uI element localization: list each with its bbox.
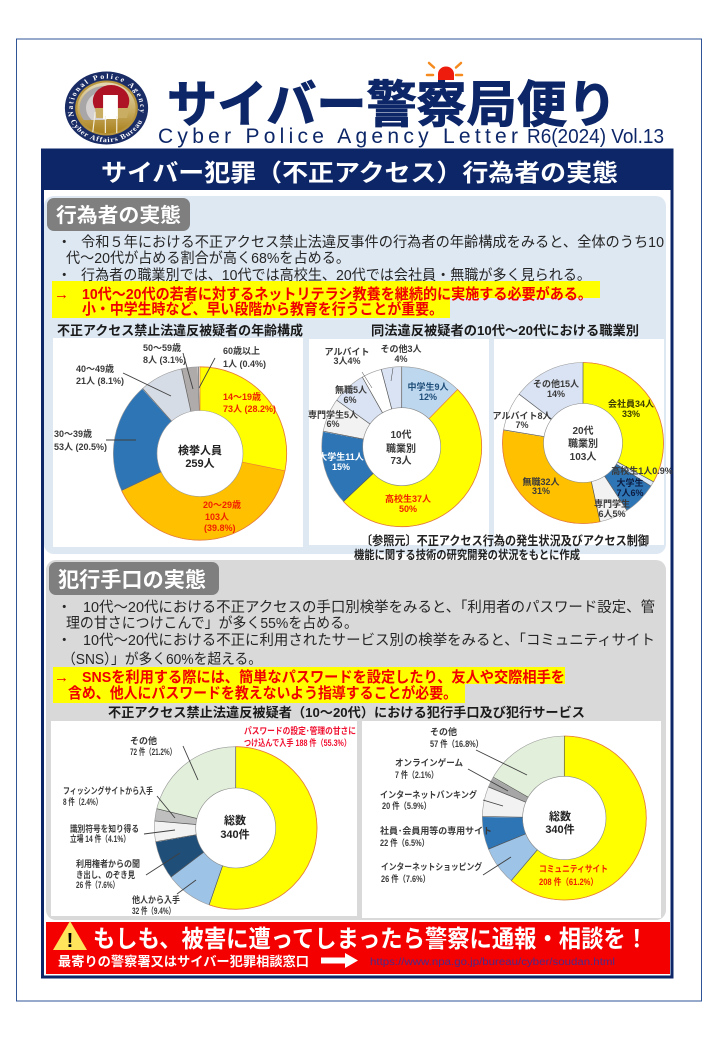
banner subtext: 最寄りの警察署又はサイバー犯罪相談窓口 [58, 954, 309, 969]
chart: age composition donut: 14～19歳 [223, 391, 261, 402]
chart: teens occupation donut: 3人4% [333, 356, 361, 366]
banner: report to police [46, 921, 670, 974]
chart: age composition donut: 21人 (8.1%) [76, 376, 124, 386]
chart: methods donut: 識別符号を知り得る [70, 823, 139, 834]
chart: teens occupation donut: 73人 [390, 455, 412, 467]
callout: password guidance: → [54, 669, 69, 686]
chart: teens occupation donut [308, 339, 489, 545]
chart: methods donut: 26 件（7.6%） [76, 879, 119, 890]
chart: methods donut [51, 721, 357, 916]
chart: services donut: その他 [430, 726, 457, 737]
chart: methods donut: その他 [130, 735, 157, 746]
chart: services donut: 22 件（6.5%） [380, 837, 429, 848]
chart: services donut: コミュニティサイト [539, 864, 608, 874]
callout: password guidance: SNSを利用する際には、簡単なパスワードを設定したり、友人や交際相手を [82, 668, 565, 686]
issue number: R6(2024) Vol.13 [527, 126, 664, 148]
chart: age composition donut [53, 338, 303, 547]
chart: age composition donut: 1人 (0.4%) [223, 359, 266, 369]
callout: education need: → [54, 286, 69, 303]
chart: twenties occupation donut: 33% [622, 409, 640, 419]
content frame [42, 150, 672, 977]
heading: age chart: 不正アクセス禁止法違反被疑者の年齢構成 [57, 323, 303, 338]
chart: age composition donut: 8人 (3.1%) [143, 355, 186, 365]
chart: twenties occupation donut: 7人6% [616, 488, 644, 498]
chart: methods donut: 他人から入手 [132, 894, 180, 905]
callout: password guidance: 含め、他人にパスワードを教えないよう指導することが必要。 [68, 684, 457, 702]
source note: 〔参照元〕不正アクセス行為の発生状況及びアクセス制御 [361, 533, 649, 548]
chart: twenties occupation donut: アルバイト8人 [493, 411, 551, 421]
chart: twenties occupation donut: 専門学生 [594, 498, 630, 509]
chart: services donut: オンラインゲーム [395, 757, 463, 768]
heading: occupation charts: 同法違反被疑者の10代～20代における職業別 [371, 323, 639, 338]
callout: password guidance [53, 667, 565, 703]
icon: siren light [427, 63, 462, 80]
chart: twenties occupation donut: 会社員34人 [608, 398, 654, 409]
text block: offender summary: ・ [57, 235, 72, 251]
chart: methods donut: パスワードの設定･管理の甘さに [244, 725, 356, 736]
source note [354, 533, 649, 562]
logo: cyber affairs bureau emblem: National Police Agency [68, 74, 144, 117]
arrow [321, 953, 358, 968]
chart: age composition donut: 40～49歳 [76, 363, 114, 374]
text block: offender summary: 行為者の職業別では、10代では高校生、20代では会社員・無職が多く見られる。 [81, 266, 591, 284]
callout: education need: 10代～20代の若者に対するネットリテラシ教養を継続的に実施する必要がある。 [82, 285, 592, 303]
text block: methods summary: （SNS）」が多く60%を超える。 [62, 650, 262, 668]
text block: methods summary: 理の甘さにつけこんで」が多く55%を占める。 [66, 614, 358, 632]
heading: methods and services charts: 不正アクセス禁止法違反被疑者（10～20代）における犯行手口及び犯行サービス [108, 705, 585, 720]
callout: education need: 小・中学生時など、早い段階から教育を行うことが重要。 [82, 300, 443, 318]
chart: services donut: 26 件（7.6%） [381, 873, 430, 884]
chart: methods donut: 72 件（21.2%） [130, 746, 176, 757]
chart: twenties occupation donut: 6人5% [598, 509, 626, 519]
chart: teens occupation donut: 中学生9人 [407, 381, 449, 392]
chart: services donut: 総数 [549, 809, 571, 823]
heading tab: methods [49, 562, 219, 595]
text block: methods summary: ・ [57, 600, 72, 616]
chart: age composition donut: 73人 (28.2%) [223, 404, 276, 414]
chart: teens occupation donut: 職業別 [386, 442, 416, 455]
chart: age composition donut: 30～39歳 [54, 428, 92, 439]
chart: twenties occupation donut: 14% [547, 389, 565, 399]
text block: methods summary: 10代～20代における不正に利用されたサービス別の検挙をみると、「コミュニティサイト [83, 632, 655, 649]
chart: teens occupation donut: 高校生37人 [385, 493, 431, 504]
chart: age composition donut: 259人 [185, 458, 215, 470]
chart: twenties occupation donut: 大学生 [616, 477, 644, 488]
chart: services donut: 208 件（61.2%） [539, 876, 598, 887]
chart: methods donut: 立場 14 件（4.1%） [70, 833, 130, 844]
banner headline: もしも、被害に遭ってしまったら警察に通報・相談を！ [93, 926, 648, 953]
logo: cyber affairs bureau emblem [64, 72, 148, 144]
chart: teens occupation donut: アルバイト [325, 347, 369, 357]
panel: methods [46, 560, 666, 920]
heading tab: offenders: 行為者の実態 [56, 204, 181, 227]
chart: methods donut: き出し、のぞき見 [76, 869, 135, 880]
chart: twenties occupation donut: 高校生1人0.9% [611, 465, 673, 476]
chart: services donut: 20 件（5.9%） [382, 800, 431, 811]
text block: offender summary: 令和５年における不正アクセス禁止法違反事件の行為者の年齢構成をみると、全体のうち10 [81, 234, 664, 251]
chart: methods donut: 32 件（9.4%） [132, 905, 175, 916]
chart: age composition donut: 53人 (20.5%) [54, 442, 107, 452]
chart: age composition donut: 60歳以上 [223, 345, 260, 356]
chart: twenties occupation donut: 無職32人 [522, 476, 560, 487]
main title: サイバー警察局便り [167, 77, 617, 133]
chart: services donut: 340件 [545, 822, 575, 836]
chart: twenties occupation donut: 31% [532, 486, 550, 496]
chart: age composition donut: 検挙人員 [178, 443, 222, 457]
chart: teens occupation donut: 専門学生5人 [308, 409, 358, 420]
chart: teens occupation donut: 12% [419, 392, 437, 402]
chart: services donut: 7 件（2.1%） [395, 769, 438, 780]
text block: methods summary [57, 598, 655, 668]
chart: services donut: インターネットショッピング [381, 861, 482, 872]
chart: methods donut: 利用権者からの聞 [76, 858, 140, 869]
icon: warning triangle: ! [67, 930, 73, 952]
chart: age composition donut: 20～29歳 [203, 499, 241, 510]
chart: twenties occupation donut: その他15人 [533, 378, 579, 389]
logo: cyber affairs bureau emblem: Cyber Affairs Bureau [71, 120, 142, 142]
chart: age composition donut: (39.8%) [204, 523, 236, 533]
text block: methods summary: ・ [57, 633, 72, 649]
source note: 機能に関する技術の研究開発の状況をもとに作成 [354, 547, 580, 562]
chart: methods donut: フィッシングサイトから入手 [63, 785, 153, 796]
panel: offenders [44, 196, 673, 562]
chart: teens occupation donut: 4% [394, 354, 408, 364]
chart: teens occupation donut: 15% [332, 462, 350, 472]
text block: offender summary: 代～20代が占める割合が高く68%を占める。 [66, 250, 350, 267]
consultation link: https://www.npa.go.jp/bureau/cyber/soudan.html [370, 957, 615, 968]
chart: teens occupation donut: 6% [343, 395, 357, 405]
chart: services donut: インターネットバンキング [380, 789, 477, 800]
chart: teens occupation donut: 大学生11人 [318, 451, 364, 462]
text block: methods summary: 10代～20代における不正アクセスの手口別検挙をみると、「利用者のパスワード設定、管 [83, 598, 655, 616]
chart: teens occupation donut: 50% [399, 504, 417, 514]
chart: twenties occupation donut: 103人 [570, 451, 596, 463]
chart: teens occupation donut: 6% [326, 419, 340, 429]
chart: twenties occupation donut: 職業別 [568, 437, 598, 450]
text block: offender summary: ・ [57, 268, 72, 284]
chart: methods donut: 8 件（2.4%） [63, 796, 102, 807]
chart: age composition donut: 103人 [205, 512, 229, 522]
text block: offender summary [57, 234, 664, 284]
heading tab: offenders [47, 198, 190, 231]
chart: age composition donut: 50～59歳 [143, 342, 181, 353]
heading tab: methods: 犯行手口の実態 [58, 569, 206, 592]
chart: services donut: 57 件（16.8%） [430, 738, 483, 749]
chart: methods donut: つけ込んで入手 188 件（55.3%） [244, 737, 351, 748]
subtitle: Cyber Police Agency Letter: Cyber Police Agency Letter [158, 125, 518, 148]
icon: warning triangle [53, 921, 87, 952]
title band [41, 149, 673, 190]
chart: methods donut: 340件 [220, 827, 250, 841]
chart: twenties occupation donut: 7% [515, 420, 529, 430]
chart: methods donut: 総数 [224, 813, 246, 827]
title band: サイバー犯罪（不正アクセス）行為者の実態 [101, 160, 618, 187]
chart: services donut: 社員･会員用等の専用サイト [380, 825, 492, 836]
chart: twenties occupation donut [493, 339, 673, 545]
chart: services donut [362, 721, 661, 918]
chart: twenties occupation donut: 20代 [572, 425, 594, 437]
chart: teens occupation donut: 10代 [390, 429, 412, 441]
chart: teens occupation donut: 無職5人 [335, 384, 367, 395]
chart: teens occupation donut: その他3人 [380, 343, 422, 354]
callout: education need [52, 281, 600, 318]
